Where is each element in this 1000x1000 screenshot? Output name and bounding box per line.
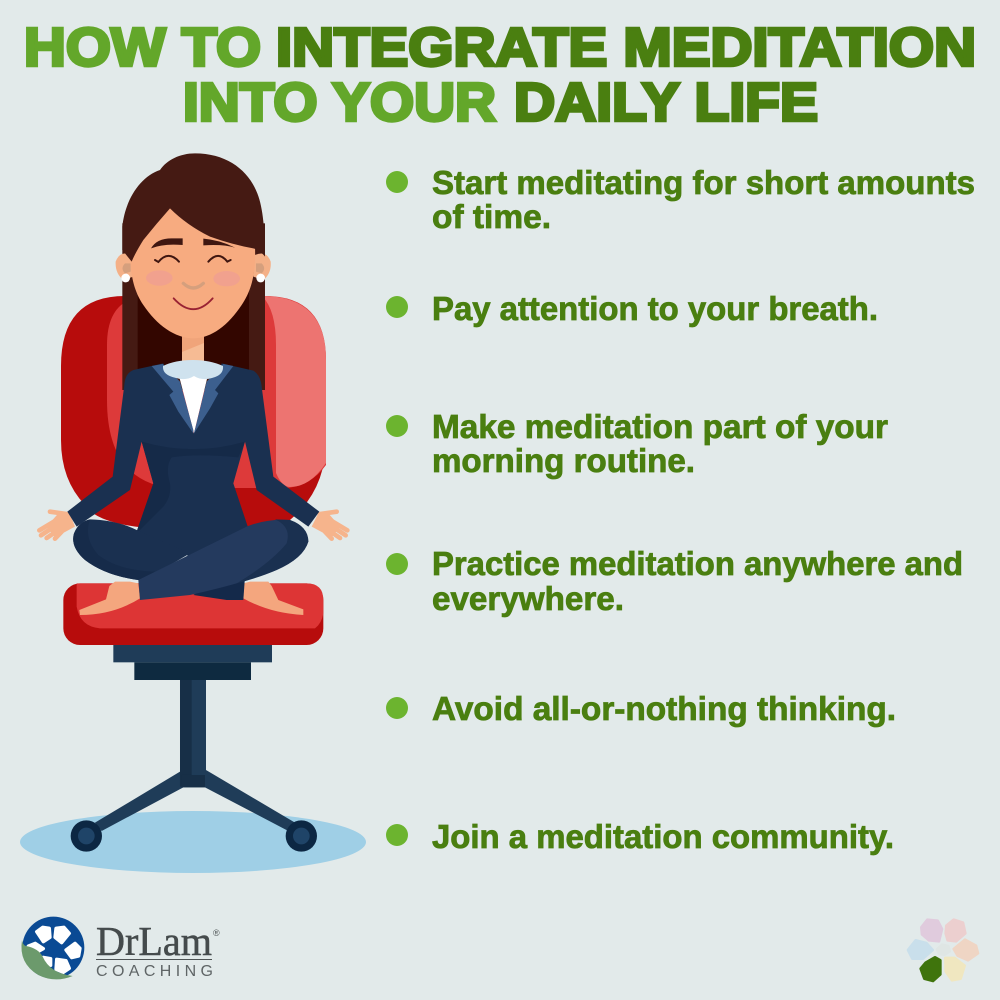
item 4: Practice meditation anywhere and xyxy=(432,545,963,582)
left foot xyxy=(79,582,140,615)
title: INTEGRATE MEDITATION xyxy=(276,18,976,78)
bullet list xyxy=(386,164,975,855)
closed eyes xyxy=(155,256,231,262)
left ear xyxy=(116,253,133,280)
chair back xyxy=(61,296,326,530)
item 5: Avoid all-or-nothing thinking. xyxy=(432,690,896,727)
left lapel xyxy=(152,364,193,433)
chair legs xyxy=(95,770,295,831)
title xyxy=(24,18,976,132)
right knee shadow xyxy=(237,519,308,583)
flower icon xyxy=(908,920,978,981)
logo wordmark: DrLam xyxy=(96,918,212,964)
item 4 xyxy=(386,545,963,617)
item 3 xyxy=(386,408,888,479)
title: DAILY LIFE xyxy=(514,72,818,132)
floor shadow xyxy=(20,811,366,873)
body xyxy=(39,363,347,615)
item 3: Make meditation part of your xyxy=(432,408,888,445)
flower center xyxy=(45,942,59,956)
item 1: of time. xyxy=(432,198,551,235)
neck xyxy=(182,330,204,365)
right foot xyxy=(243,582,303,615)
inner ears xyxy=(122,263,264,273)
hair back xyxy=(122,223,265,390)
left leg shadow xyxy=(73,519,160,581)
item 1 xyxy=(386,164,975,235)
collar xyxy=(163,360,223,379)
right ear xyxy=(253,253,271,280)
shirt xyxy=(178,373,208,433)
chair base xyxy=(71,645,317,852)
neck shadow xyxy=(182,332,204,352)
woman xyxy=(39,153,347,615)
green leaf xyxy=(21,940,73,979)
right hand xyxy=(312,512,347,539)
smile xyxy=(174,298,213,309)
logo mark xyxy=(21,917,84,979)
item 4: everywhere. xyxy=(432,580,624,617)
suit jacket xyxy=(67,363,319,557)
hair top xyxy=(122,153,265,262)
item 3: morning routine. xyxy=(432,442,695,479)
chair seat xyxy=(63,583,323,645)
eyebrows xyxy=(151,238,235,248)
registered mark: ® xyxy=(213,928,220,938)
left wheel xyxy=(71,820,102,852)
logo subtitle: COACHING xyxy=(96,963,213,980)
item 2: Pay attention to your breath. xyxy=(432,290,878,327)
chair column xyxy=(180,680,206,787)
left hand xyxy=(39,512,75,539)
seat mount xyxy=(113,645,272,680)
right lapel xyxy=(194,364,233,433)
item 6: Join a meditation community. xyxy=(432,818,894,855)
left leg xyxy=(73,519,190,581)
cheeks xyxy=(146,270,240,286)
title: INTO YOUR xyxy=(183,72,496,132)
right leg xyxy=(138,520,308,600)
earrings xyxy=(121,274,265,282)
logo: DrLam Coaching xyxy=(21,917,220,980)
right wheel xyxy=(286,820,317,852)
face xyxy=(130,207,255,338)
nose xyxy=(183,283,203,288)
item 1: Start meditating for short amounts xyxy=(432,164,975,201)
jacket shading xyxy=(137,442,245,532)
logo rule xyxy=(96,959,212,960)
title: HOW TO xyxy=(24,18,261,78)
head xyxy=(116,153,271,338)
lower shin xyxy=(193,577,245,600)
flower petals xyxy=(28,927,80,972)
